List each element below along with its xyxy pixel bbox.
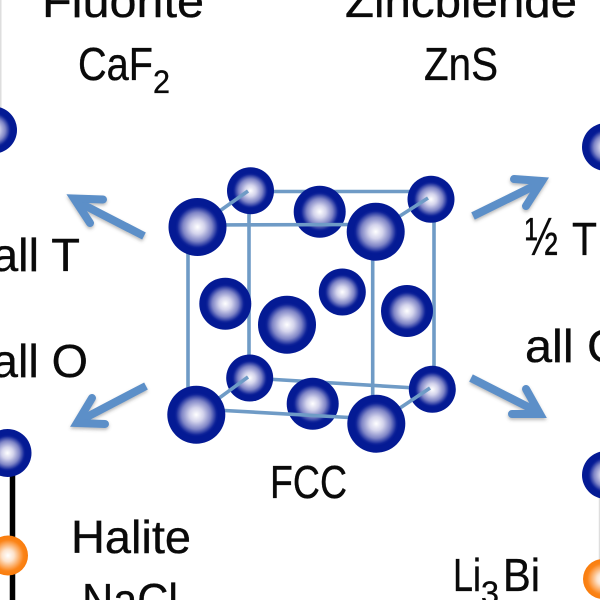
atom: left face — [199, 278, 251, 330]
label: Li3Bi — [453, 549, 540, 600]
atom: right face — [381, 285, 433, 337]
atom: top face — [294, 186, 346, 238]
arrow: to Li3Bi — [471, 378, 540, 414]
atom: back face — [319, 268, 366, 316]
arrow: to zincblende — [473, 179, 542, 216]
atom: back top left — [227, 167, 274, 214]
arrow: to fluorite — [74, 198, 144, 236]
atom: lower left orange — [0, 536, 28, 576]
atom: top left blue — [0, 106, 17, 154]
atom: lower right orange — [583, 559, 600, 599]
front cell edges — [188, 191, 430, 424]
label: half T: ½ — [525, 207, 558, 267]
label: CaF2: 2 — [153, 64, 170, 100]
atom: bottom face — [287, 378, 339, 430]
label: half T — [525, 207, 597, 267]
atom: lower right blue — [582, 451, 600, 499]
arrow: to halite — [77, 386, 146, 424]
left edge rod: upper — [0, 0, 2, 110]
label: Li3Bi: Bi — [503, 549, 540, 600]
label: Halite: Halite — [71, 511, 191, 563]
label: ZnS: ZnS — [424, 38, 498, 90]
atom: lower left blue — [0, 429, 32, 477]
FCC unit cell — [167, 167, 456, 453]
atom: back top right — [408, 176, 454, 223]
back cell edges — [249, 191, 434, 389]
label: Li3Bi: Li — [453, 549, 481, 600]
right edge rod — [598, 495, 600, 560]
atom: back bottom right — [409, 366, 456, 413]
atom: front top left — [168, 198, 226, 256]
label: FCC: FCC — [270, 456, 347, 508]
atom: front bottom right — [347, 395, 405, 453]
atom: front face — [258, 296, 316, 354]
atom: front bottom left — [167, 386, 225, 444]
label: CaF2: CaF — [78, 38, 153, 90]
atom: top right blue — [582, 123, 600, 171]
left edge rod: black — [10, 470, 15, 600]
label: half T: T — [572, 213, 597, 265]
atom: front top right — [347, 203, 405, 261]
atom: back bottom left — [226, 354, 273, 402]
